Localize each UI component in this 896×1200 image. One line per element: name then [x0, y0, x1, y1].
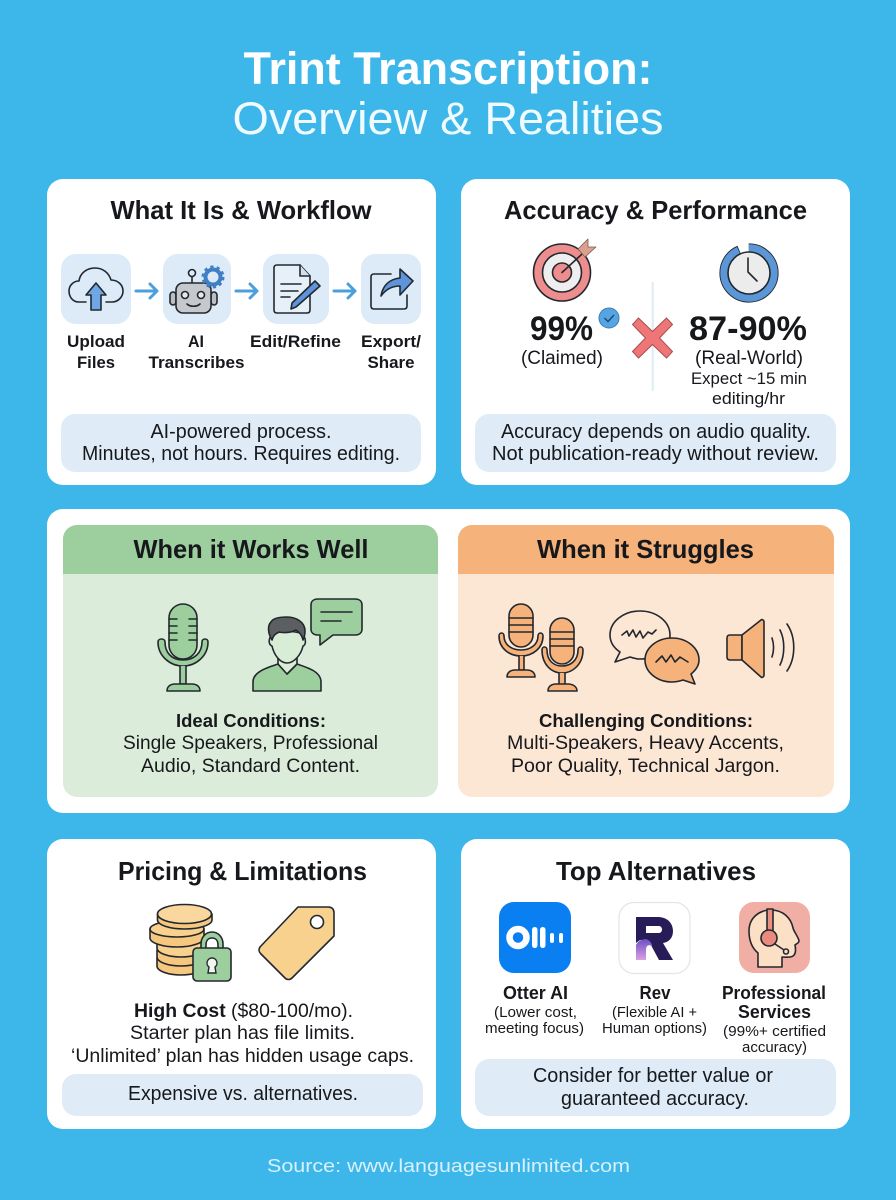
icon: loudspeaker	[727, 620, 794, 677]
callout: alternatives note	[475, 1059, 836, 1116]
step labels: Edit/Refine	[250, 332, 341, 351]
label: otter ai: meeting focus)	[485, 1020, 584, 1037]
panel: pricing and limitations	[47, 839, 436, 1129]
challenging conditions text: Multi-Speakers, Heavy Accents,	[507, 733, 784, 754]
arrow 1	[136, 284, 157, 298]
icon: two microphones	[499, 604, 583, 691]
arrow 3	[334, 284, 355, 298]
heading: what it is: What It Is & Workflow	[110, 195, 372, 225]
icon: rev logo	[619, 902, 690, 974]
pricing text	[71, 1001, 414, 1067]
real-world stat: (Real-World)	[695, 348, 803, 369]
pricing text: High Cost ($80-100/mo).	[134, 1001, 353, 1022]
ideal conditions text: Ideal Conditions:	[176, 711, 326, 731]
label: professional services: Services	[738, 1002, 811, 1022]
claimed stat: 99%	[530, 310, 593, 348]
icon: overlapping speech bubbles	[610, 611, 699, 684]
challenging conditions text: Poor Quality, Technical Jargon.	[511, 756, 780, 777]
label: otter ai: (Lower cost,	[494, 1004, 577, 1021]
callout: accuracy note	[475, 414, 836, 472]
callout: accuracy note: Accuracy depends on audio quality.	[501, 421, 811, 443]
real-world stat: 87-90%	[689, 310, 807, 348]
callout: pricing note: Expensive vs. alternatives.	[128, 1083, 358, 1105]
icon: professional services headset	[739, 902, 810, 973]
ideal conditions text: Audio, Standard Content.	[141, 756, 360, 777]
icon: coins with lock	[150, 904, 231, 981]
step labels: Transcribes	[148, 353, 244, 372]
icon: robot	[163, 254, 231, 324]
challenging conditions text	[507, 711, 784, 777]
label: rev: Rev	[640, 983, 670, 1003]
panel: what it is and workflow	[47, 179, 436, 485]
label: rev: (Flexible AI +	[612, 1004, 697, 1021]
callout: accuracy note: Not publication-ready without review.	[492, 443, 819, 465]
icon: otter logo	[499, 902, 571, 973]
title	[232, 43, 664, 144]
step labels: AI	[188, 332, 204, 351]
callout: workflow note	[61, 414, 421, 472]
icon: speaker person	[253, 599, 362, 691]
label: professional services: Professional	[722, 983, 826, 1003]
ideal conditions text	[123, 711, 378, 777]
claimed stat: (Claimed)	[521, 348, 603, 369]
label: rev	[602, 983, 707, 1037]
step labels: Upload	[67, 332, 125, 351]
pricing text: ‘Unlimited’ plan has hidden usage caps.	[71, 1046, 414, 1067]
panel: accuracy and performance	[461, 179, 850, 485]
icon: clock	[724, 248, 774, 298]
title: Overview & Realities	[232, 93, 664, 144]
panel: when it works well	[63, 525, 438, 797]
label: otter ai	[485, 983, 584, 1037]
divider	[652, 282, 654, 391]
real-world stat: editing/hr	[712, 389, 785, 408]
title: Trint Transcription:	[244, 43, 652, 94]
step labels: Files	[77, 353, 115, 372]
icon: target	[534, 239, 596, 301]
heading: works well: When it Works Well	[134, 534, 368, 564]
callout: workflow note: Minutes, not hours. Requires editing.	[82, 443, 400, 465]
panel: when it struggles	[458, 525, 834, 797]
heading: alternatives: Top Alternatives	[556, 856, 756, 886]
icon: upload files	[61, 254, 131, 324]
callout: alternatives note: Consider for better value or	[533, 1065, 773, 1087]
callout: workflow note: AI-powered process.	[150, 421, 332, 443]
icon: document edit	[263, 254, 329, 324]
label: rev: Human options)	[602, 1020, 707, 1037]
step labels	[67, 332, 421, 372]
icon: export share	[361, 254, 421, 324]
real-world stat: Expect ~15 min	[691, 369, 807, 388]
label: professional services	[722, 983, 826, 1056]
source line: Source: www.languagesunlimited.com	[267, 1156, 630, 1176]
step labels: Share	[368, 353, 414, 372]
pricing text: Starter plan has file limits.	[130, 1023, 355, 1044]
icon: price tag	[259, 907, 334, 980]
real-world stat	[689, 310, 807, 408]
label: otter ai: Otter AI	[503, 983, 568, 1003]
heading: accuracy: Accuracy & Performance	[504, 195, 807, 225]
challenging conditions text: Challenging Conditions:	[539, 711, 753, 731]
callout: alternatives note: guaranteed accuracy.	[561, 1088, 749, 1110]
claimed stat	[521, 310, 603, 369]
callout: pricing note	[62, 1074, 423, 1116]
heading: struggles: When it Struggles	[537, 534, 754, 564]
icon: microphone	[158, 604, 208, 691]
panel: conditions	[47, 509, 850, 813]
step labels: Export/	[361, 332, 421, 351]
icon: red cross	[632, 318, 672, 358]
panel: top alternatives	[461, 839, 850, 1129]
icon: check badge	[599, 308, 619, 328]
arrow 2	[236, 284, 257, 298]
label: professional services: accuracy)	[742, 1039, 807, 1056]
ideal conditions text: Single Speakers, Professional	[123, 733, 378, 754]
label: professional services: (99%+ certified	[723, 1023, 826, 1040]
heading: pricing: Pricing & Limitations	[118, 856, 367, 886]
